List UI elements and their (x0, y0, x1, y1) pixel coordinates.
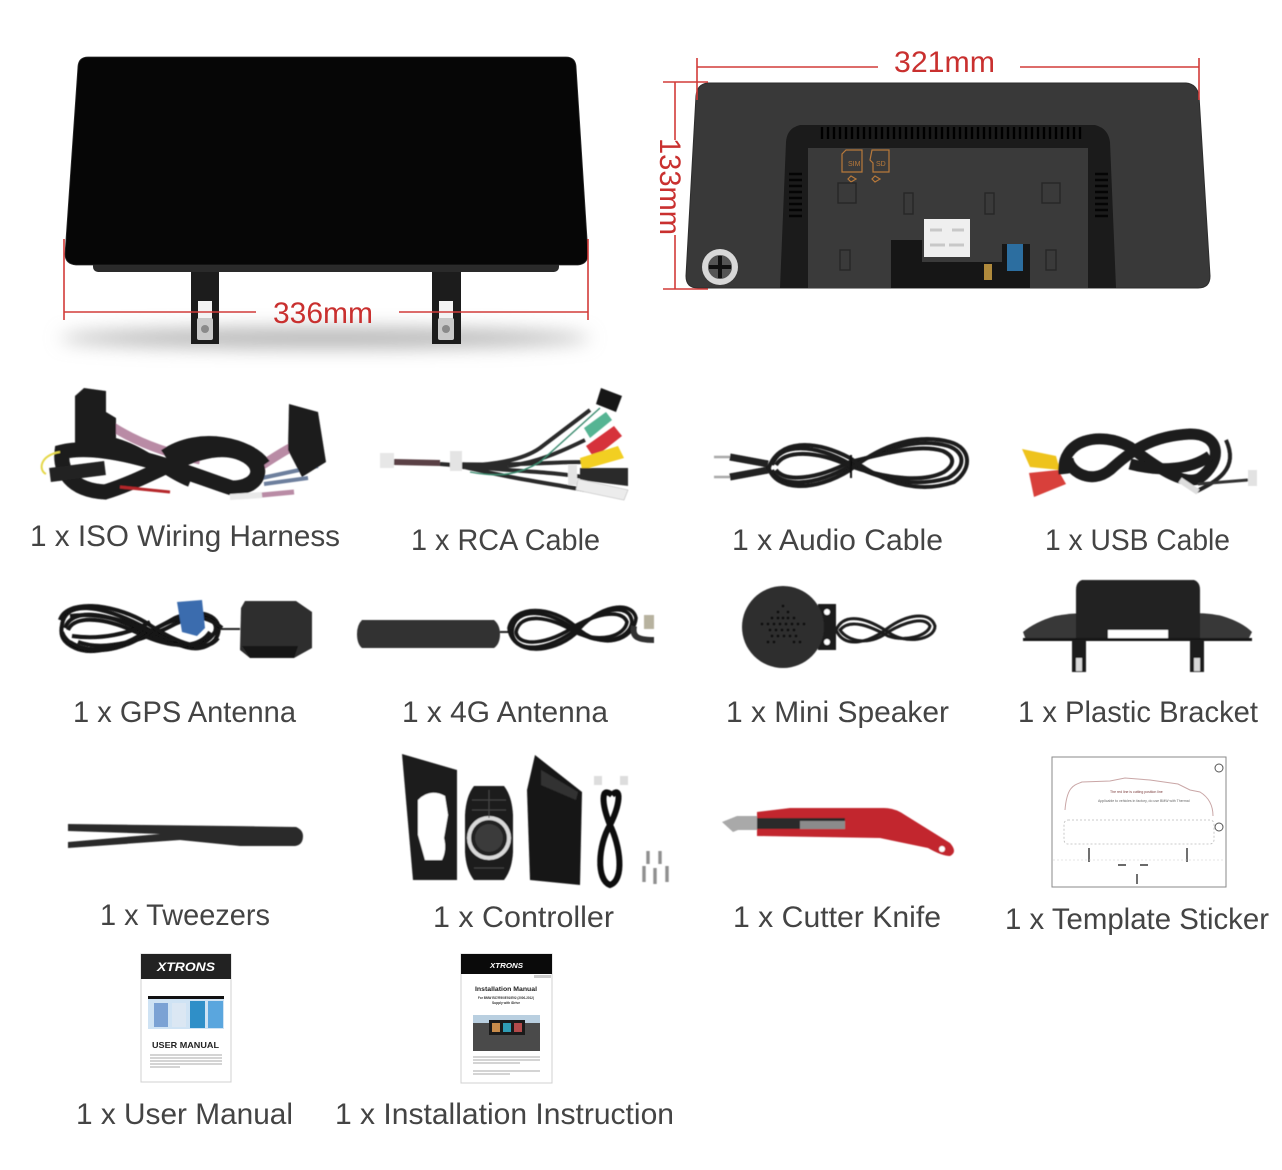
label: user manual: 1 x User Manual (76, 1098, 293, 1131)
item: installation manual: Installation Manual (475, 986, 537, 993)
item: tweezers (68, 824, 303, 848)
item: plastic bracket (1023, 580, 1252, 672)
item: template sticker: The red line is cutting position line (1110, 790, 1163, 794)
item: user manual: XTRONS (156, 960, 215, 974)
label: RCA cable: 1 x RCA Cable (411, 524, 600, 557)
label: cutter knife: 1 x Cutter Knife (733, 901, 941, 934)
rear housing (686, 83, 1210, 288)
left trim (402, 754, 457, 880)
lower bezel (93, 258, 559, 272)
label: USB cable: 1 x USB Cable (1045, 524, 1230, 557)
gold antenna port (984, 264, 992, 280)
product: back of screen with dimensions (653, 46, 1210, 289)
label: tweezers: 1 x Tweezers (100, 899, 270, 932)
label: ISO wiring harness: 1 x ISO Wiring Harness (30, 520, 340, 553)
floor shadow (60, 328, 590, 348)
label: plastic bracket: 1 x Plastic Bracket (1018, 696, 1259, 729)
item: template sticker: Applicable to vehicles in factory, do use BMW with Thermal (1098, 799, 1190, 803)
vents (822, 127, 1080, 139)
item: controller kit (402, 754, 667, 885)
item: template sticker (1052, 757, 1226, 887)
dimension 321mm (697, 58, 1199, 100)
manual car photo (473, 1015, 540, 1051)
item: user manual: USER MANUAL (152, 1040, 219, 1050)
manual screen illustration (148, 996, 224, 1029)
label: GPS antenna: 1 x GPS Antenna (73, 696, 296, 729)
card slot icons: SD (876, 161, 886, 168)
blue port (1007, 244, 1023, 271)
inner plate (808, 148, 1088, 288)
item: 4G antenna (357, 607, 654, 649)
product: back of screen with dimensions: 321mm (894, 46, 995, 79)
label: 4G antenna: 1 x 4G Antenna (402, 696, 608, 729)
item: cutter knife (722, 808, 954, 856)
label: controller: 1 x Controller (433, 901, 614, 934)
item: RCA cable (380, 388, 628, 500)
right trim (527, 755, 582, 885)
mounting details (838, 183, 1060, 270)
screws (644, 851, 667, 884)
item: mini speaker (742, 586, 935, 668)
item: installation manual (461, 954, 552, 1083)
connector bay (891, 240, 1030, 288)
item: audio cable (714, 439, 967, 487)
label: mini speaker: 1 x Mini Speaker (726, 696, 949, 729)
label: installation instruction: 1 x Installation Instruction (335, 1098, 674, 1131)
card slot icons (842, 150, 889, 182)
card slot icons: SIM (848, 161, 861, 168)
white connector (924, 219, 970, 257)
recessed area (780, 125, 1116, 288)
service sticker (702, 249, 738, 285)
label: template sticker: 1 x Template Sticker (1005, 903, 1269, 936)
item: GPS antenna (60, 600, 312, 658)
product: front of screen with width dimension (60, 57, 590, 348)
mounting legs (191, 270, 461, 344)
label: audio cable: 1 x Audio Cable (732, 524, 943, 557)
rotary controller (465, 786, 513, 880)
dimension 133mm (663, 82, 708, 289)
item: installation manual: For BMW E87/E90/E91/E92 (2006-2012) (478, 995, 535, 1000)
item: user manual (141, 954, 231, 1082)
item: installation manual: XTRONS (489, 961, 523, 970)
wiring (600, 792, 619, 885)
glass display (65, 57, 588, 265)
product: front of screen with width dimension: 336mm (273, 297, 373, 330)
item: USB cable (1022, 434, 1257, 497)
item: installation manual: Supply with iDrive (492, 1000, 521, 1005)
dimension 336mm (64, 239, 588, 320)
item: ISO wiring harness (42, 388, 326, 497)
product: back of screen with dimensions: 133mm (653, 138, 686, 235)
